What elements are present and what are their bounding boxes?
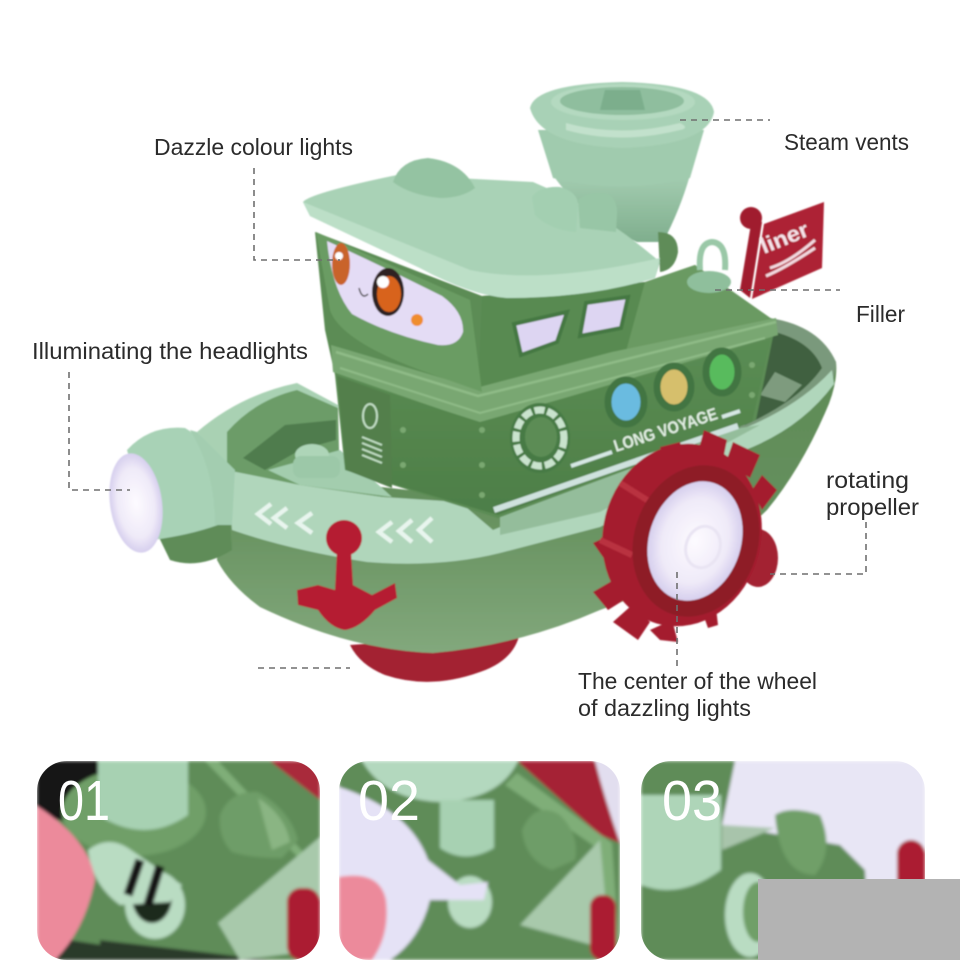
label: rotating propeller: rotating	[826, 467, 909, 493]
label: illuminating the headlights	[32, 338, 308, 490]
step panel 02	[339, 761, 620, 960]
cabin ledge	[331, 318, 778, 423]
eyes	[332, 243, 350, 285]
long voyage lettering: LONG VOYAGE	[611, 404, 720, 456]
side windows	[514, 297, 628, 355]
label: dazzle colour lights: Dazzle colour lights	[154, 134, 353, 160]
step panel 03	[641, 761, 925, 960]
step number 02: 02	[358, 769, 420, 833]
label: center of the wheel: The center of the wheel	[578, 668, 817, 694]
portholes	[608, 351, 738, 424]
cabin body	[315, 232, 778, 518]
lower cabin wall	[337, 340, 770, 515]
roof	[303, 158, 660, 298]
base pointer line	[258, 667, 350, 669]
paddle wheel	[583, 427, 781, 643]
left deck	[197, 383, 392, 497]
headlight	[103, 428, 235, 563]
label: filler: Filler	[856, 301, 905, 327]
hull	[217, 318, 836, 653]
label: rotating propeller: propeller	[826, 494, 919, 520]
rear rim and dark interior	[740, 318, 836, 445]
rivets	[400, 362, 755, 498]
label: illuminating the headlights: Illuminating the headlights	[32, 338, 308, 364]
face window	[316, 232, 482, 392]
anchor	[297, 520, 397, 630]
flag: liner	[757, 217, 813, 259]
funnel	[530, 82, 714, 272]
filler cap	[687, 242, 731, 293]
step panel 01	[37, 761, 320, 960]
label: dazzle colour lights	[154, 134, 353, 260]
flag	[740, 202, 824, 299]
roof pegs	[532, 187, 578, 232]
label: center of the wheel	[578, 572, 817, 721]
door marks	[362, 404, 382, 463]
label: steam vents: Steam vents	[784, 129, 909, 155]
grey corner block	[758, 879, 960, 960]
roof hump	[393, 158, 475, 198]
chevrons on hull	[258, 504, 432, 542]
step number 01: 01	[58, 769, 110, 833]
step number 03: 03	[662, 769, 722, 833]
red hull base	[350, 632, 520, 682]
label: center of the wheel: of dazzling lights	[578, 695, 751, 721]
toy boat illustration	[103, 82, 836, 682]
lifebuoy	[510, 403, 570, 473]
label: rotating propeller	[770, 467, 919, 574]
mint band	[227, 370, 834, 564]
